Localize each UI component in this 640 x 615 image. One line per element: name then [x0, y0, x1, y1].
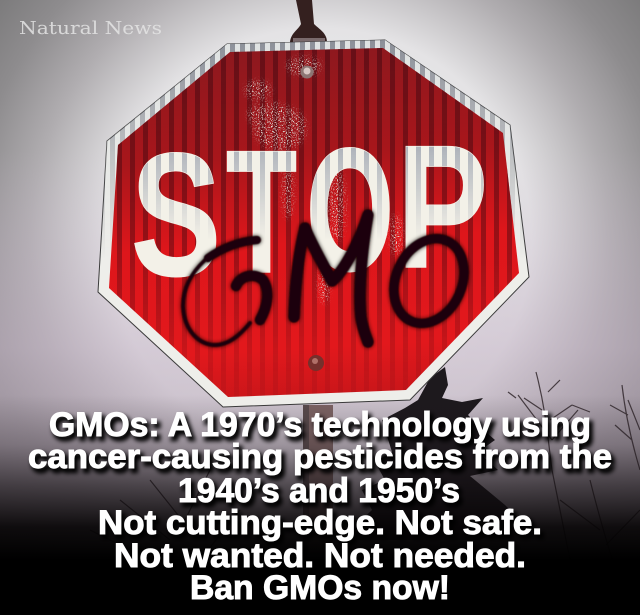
graffiti letter G	[183, 240, 267, 345]
caption shadow: Ban GMOs now!	[193, 573, 453, 611]
reflective stripes over STOP lettering: S	[131, 118, 221, 313]
bolt bottom	[308, 355, 324, 371]
graffiti letter O	[381, 227, 477, 335]
caption shadow: cancer-causing pesticides from the	[31, 442, 615, 480]
vertical ribbing on red	[109, 48, 519, 397]
caption text: Not wanted. Not needed.	[114, 537, 526, 575]
caption shadow: 1940’s and 1950’s	[181, 476, 463, 514]
caption shadow	[31, 410, 615, 611]
bottom darkening	[0, 395, 640, 615]
reflective stripes over STOP lettering: T	[226, 115, 297, 310]
caption text: Ban GMOs now!	[190, 569, 450, 607]
weathered speckles	[245, 57, 402, 303]
caption text: cancer-causing pesticides from the	[28, 438, 612, 476]
reflective stripes over STOP lettering: O	[306, 113, 394, 308]
STOP lettering: S	[131, 118, 221, 313]
STOP lettering: O	[306, 113, 394, 308]
caption text: Not cutting-edge. Not safe.	[98, 504, 542, 542]
brand: Natural News: Natural News	[19, 18, 162, 39]
sign post	[303, 405, 333, 555]
red sign face	[109, 48, 519, 397]
bolt top	[300, 66, 314, 78]
retroreflective border stripes	[102, 40, 524, 242]
reflective stripes over STOP lettering	[143, 146, 484, 228]
caption text: 1940’s and 1950’s	[178, 472, 460, 510]
GMO graffiti	[183, 215, 477, 345]
caption shadow: Not wanted. Not needed.	[117, 541, 529, 579]
caption shadow: GMOs: A 1970’s technology using	[52, 410, 594, 448]
STOP lettering: P	[397, 110, 488, 305]
reflective stripes over STOP lettering: P	[397, 110, 488, 305]
stop sign	[98, 40, 529, 407]
graffiti letter M	[294, 215, 368, 342]
caption shadow: Not cutting-edge. Not safe.	[101, 508, 545, 546]
caption text: GMOs: A 1970’s technology using	[49, 406, 591, 444]
sign bracket at top	[290, 0, 327, 42]
tree silhouettes	[90, 367, 640, 590]
STOP lettering	[131, 110, 488, 313]
sign white border	[98, 40, 529, 407]
caption text	[28, 406, 612, 607]
STOP lettering: T	[226, 115, 297, 310]
